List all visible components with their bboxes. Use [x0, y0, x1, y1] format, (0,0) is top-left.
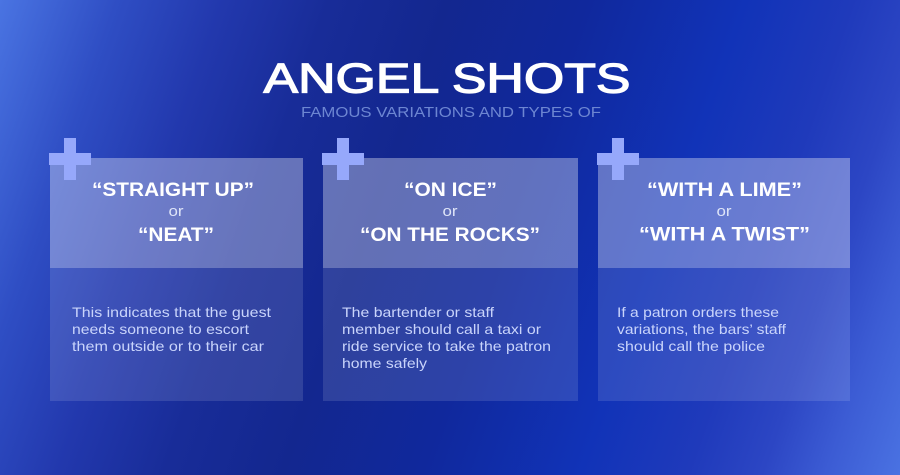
panel: on ice [322, 138, 578, 401]
card body: on ice: member should call a taxi or [342, 321, 541, 337]
card body: straight up: This indicates that the guest [72, 304, 271, 320]
icon: plus [49, 138, 91, 180]
card body: with a lime [598, 268, 850, 401]
icon: plus [597, 138, 639, 180]
card body: on ice: The bartender or staff [342, 304, 494, 320]
icon: plus [322, 138, 364, 180]
card header: straight up: “NEAT” [138, 225, 214, 246]
card body: on ice: ride service to take the patron [342, 338, 551, 354]
subtitle: FAMOUS VARIATIONS AND TYPES OF [301, 104, 601, 121]
card header: with a lime: “WITH A LIME” [647, 180, 802, 201]
card header: straight up: or [168, 203, 184, 220]
card header: straight up: “STRAIGHT UP” [92, 180, 254, 201]
card header: with a lime [598, 158, 850, 268]
card header: straight up [50, 158, 303, 268]
card header: with a lime: “WITH A TWIST” [639, 224, 810, 246]
title: ANGEL SHOTS [264, 54, 630, 102]
card header: on ice: “ON ICE” [404, 180, 497, 201]
card body: straight up: them outside or to their car [72, 338, 264, 354]
card body: straight up: needs someone to escort [72, 321, 249, 337]
card header: on ice: or [442, 203, 458, 220]
card body: with a lime: should call the police [617, 338, 765, 354]
card header: on ice: “ON THE ROCKS” [360, 225, 540, 246]
card header: with a lime: or [716, 203, 732, 220]
panel: with a lime [597, 138, 850, 401]
card body: on ice: home safely [342, 355, 427, 371]
card body: with a lime: If a patron orders these [617, 304, 779, 320]
panel: straight up [49, 138, 303, 401]
card body: with a lime: variations, the bars’ staff [617, 321, 786, 337]
card body: on ice [323, 268, 578, 401]
card header: on ice [323, 158, 578, 268]
card body: straight up [50, 268, 303, 401]
